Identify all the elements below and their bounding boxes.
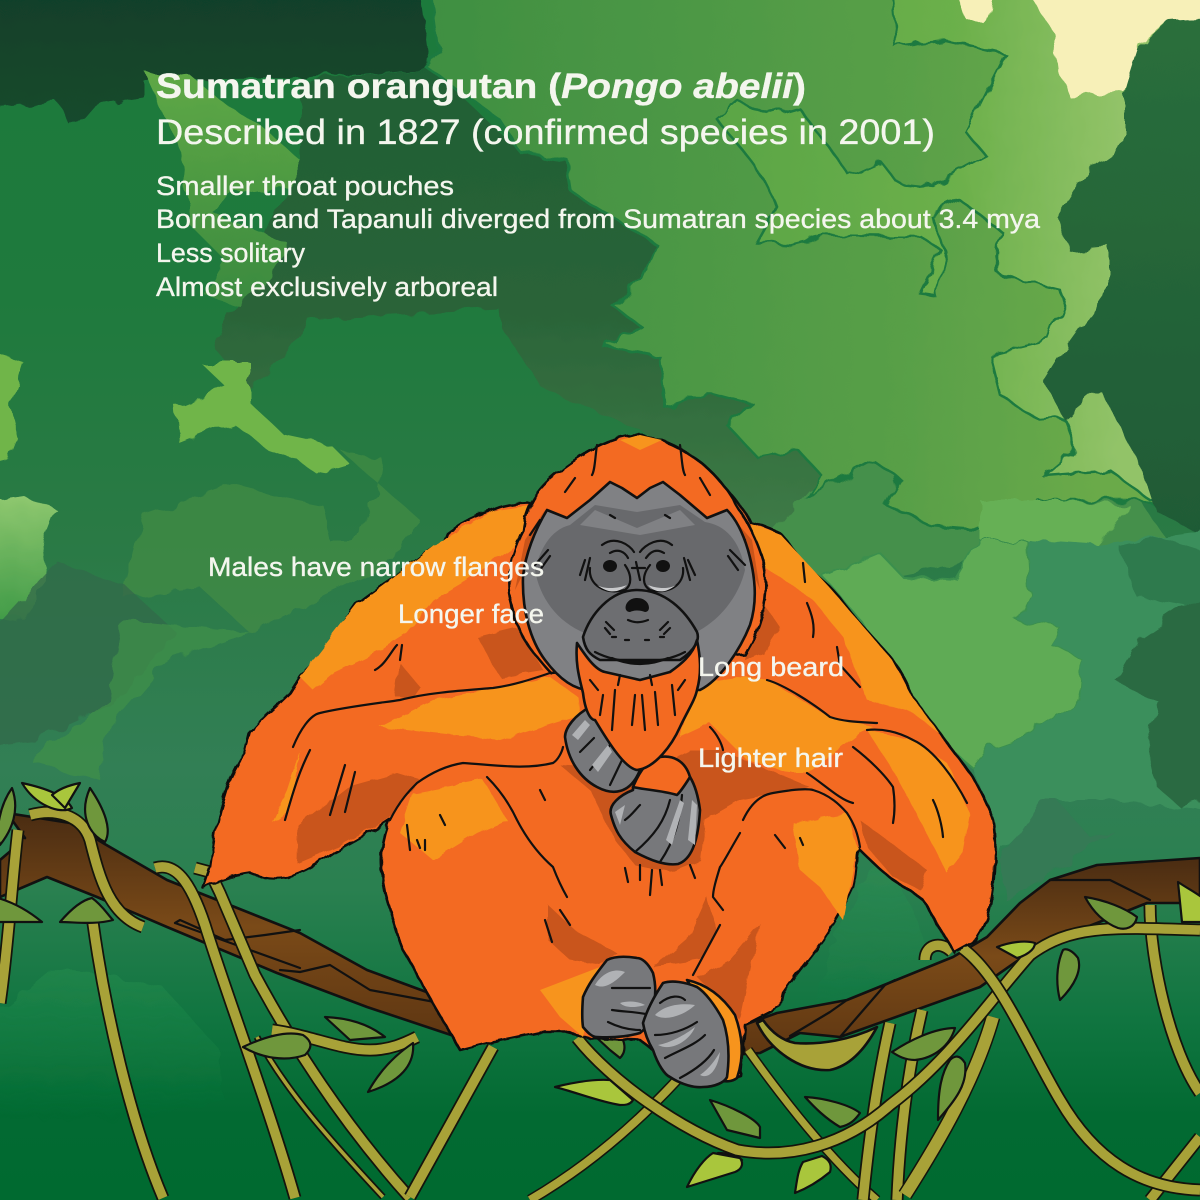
branch: left: [0, 813, 470, 1040]
species facts: [156, 171, 1041, 302]
title: Sumatran orangutan ( Pongo abelii ): [156, 67, 806, 106]
label: long beard: Long beard: [698, 652, 844, 682]
mouth: [595, 652, 685, 664]
beard: [577, 640, 700, 770]
forehead highlight: [580, 510, 695, 535]
branch: right: [730, 858, 1200, 1055]
light fur patches: [272, 505, 970, 920]
title: [156, 67, 935, 152]
dark fur shading: [297, 603, 927, 1020]
hand: gripping hand: [565, 707, 640, 792]
species facts: Smaller throat pouches: [156, 171, 454, 201]
head hood: [509, 435, 766, 672]
fur lines: [285, 563, 967, 1013]
orangutan: [203, 435, 995, 1087]
eyes and brow: [535, 515, 745, 591]
muzzle: [583, 590, 698, 660]
hand: foot right: [643, 980, 742, 1087]
face: [523, 482, 755, 690]
beard strands: [590, 675, 685, 730]
leaves: [0, 783, 1200, 1193]
label: narrow flanges: Males have narrow flanges: [208, 552, 544, 582]
title: Described in 1827 (confirmed species in 2001): [156, 113, 935, 152]
hand: lower fist on chest: [611, 757, 700, 864]
species facts: Bornean and Tapanuli diverged from Sumatran species about 3.4 mya: [156, 204, 1041, 234]
label: longer face: Longer face: [398, 599, 544, 629]
vines: [0, 812, 1200, 1200]
hood details: [515, 435, 760, 590]
body silhouette: [203, 436, 995, 1087]
nose: [626, 598, 649, 612]
face shading: [535, 505, 745, 635]
species facts: Less solitary: [156, 238, 305, 268]
species facts: Almost exclusively arboreal: [156, 272, 498, 302]
label: lighter hair: Lighter hair: [698, 743, 843, 773]
muzzle creases: [605, 620, 670, 640]
hand: foot left: [540, 957, 655, 1037]
